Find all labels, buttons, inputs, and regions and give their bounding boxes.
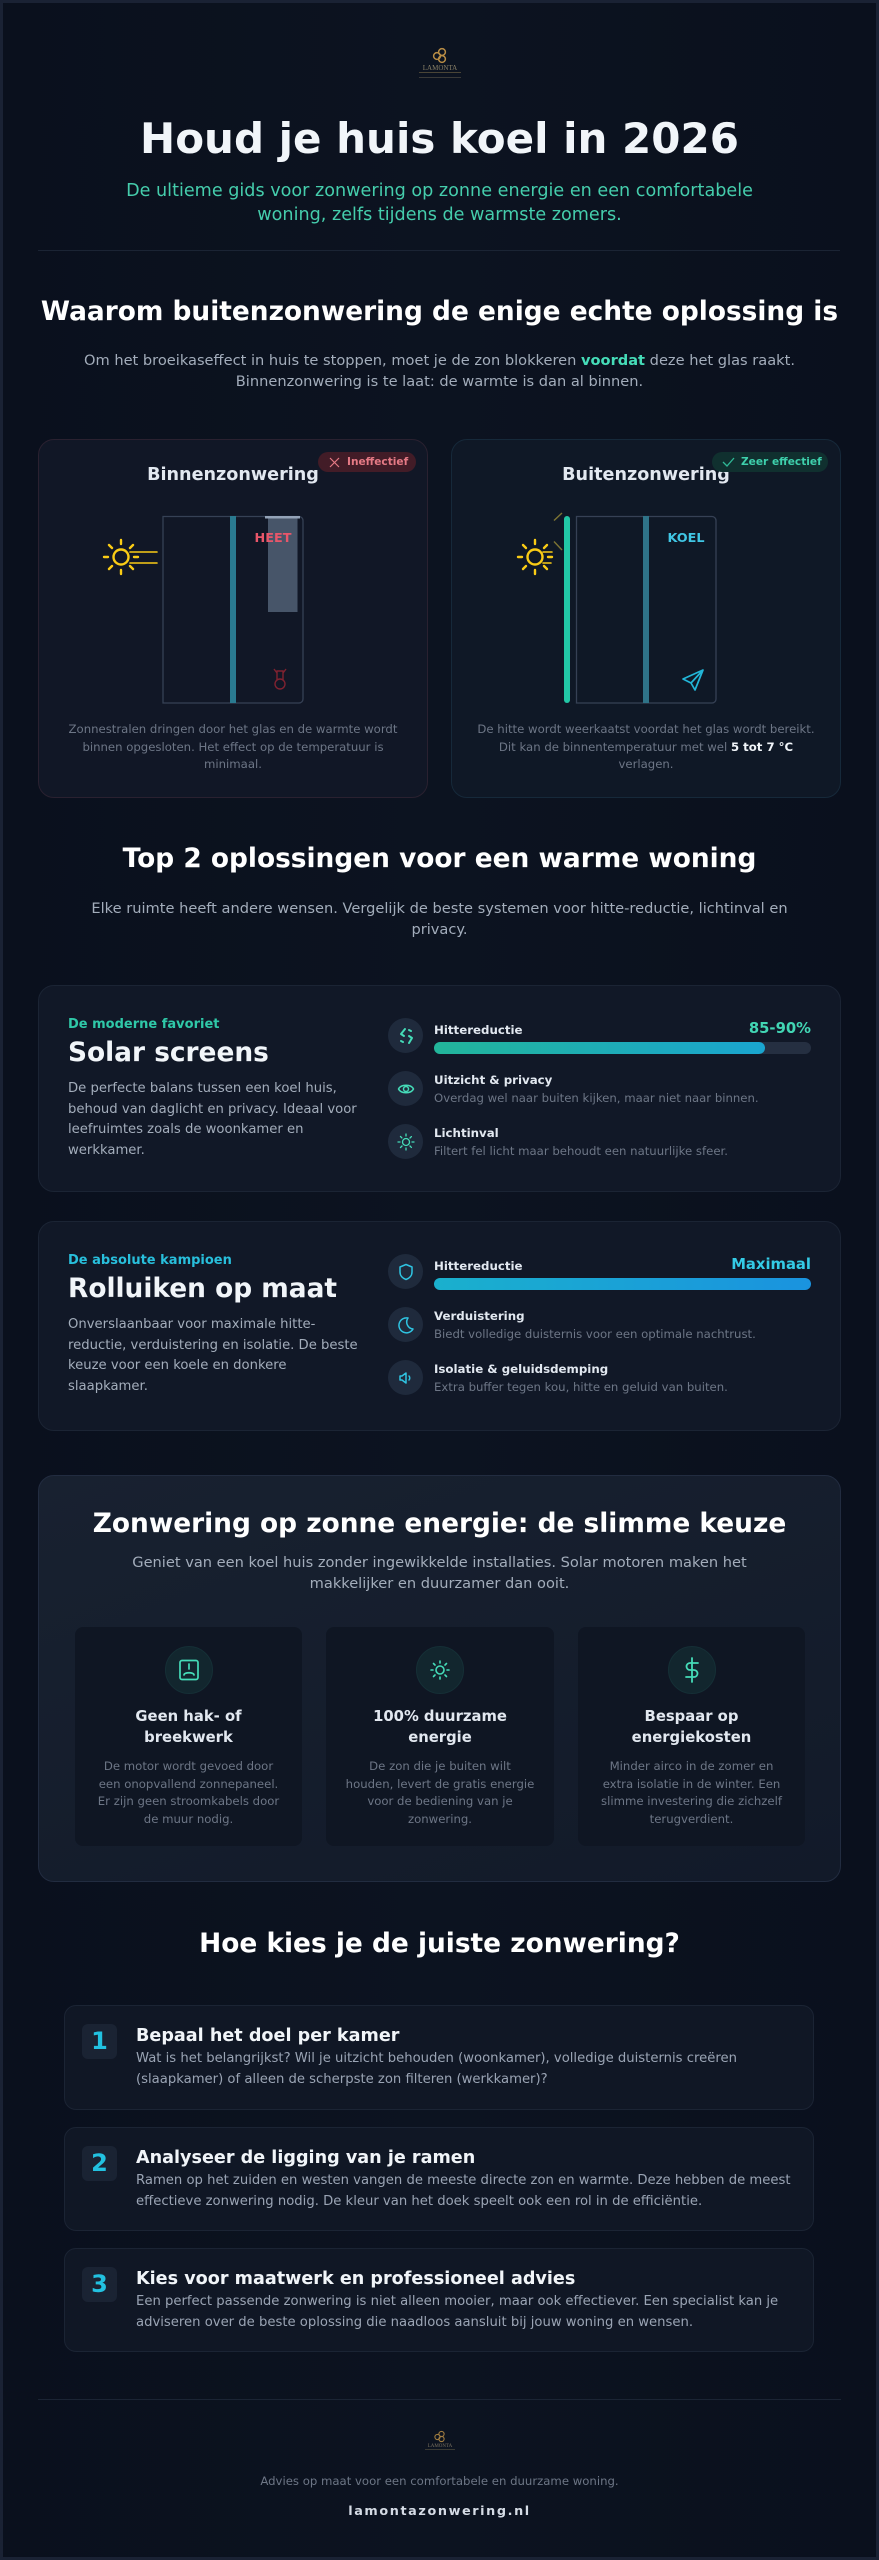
description — [68, 1317, 358, 1394]
step 3 — [64, 2248, 814, 2352]
card text: Minder airco in de zomer en — [610, 1759, 773, 1773]
heading: rolluiken: Rolluiken op maat — [68, 1273, 337, 1304]
badge: ineffectief — [318, 452, 416, 472]
card text: houden, levert de gratis energie — [346, 1777, 534, 1791]
intro paragraph: Binnenzonwering is te laat: de warmte is dan al binnen. — [236, 372, 643, 390]
heading: solar screens: Solar screens — [68, 1037, 269, 1068]
card title: energie — [408, 1729, 472, 1746]
panel text — [69, 722, 398, 771]
feature: verduistering: Verduistering — [434, 1309, 525, 1323]
card text: de muur nodig. — [144, 1812, 233, 1826]
number 1 — [82, 2024, 117, 2059]
panel text: minimaal. — [204, 757, 262, 771]
description: Onverslaanbaar voor maximale hitte- — [68, 1317, 315, 1332]
card text: De motor wordt gevoed door — [104, 1759, 273, 1773]
icon: maan — [388, 1307, 423, 1342]
icon: zon — [388, 1124, 423, 1159]
card text: een onopvallend zonnepaneel. — [99, 1777, 278, 1791]
heading: hoe kies je: Hoe kies je de juiste zonwering? — [199, 1928, 680, 1959]
description: werkkamer. — [68, 1142, 145, 1158]
intro: makkelijker en duurzamer dan ooit. — [310, 1575, 569, 1592]
number 3 — [82, 2267, 117, 2302]
intro paragraph: Om het broeikaseffect in huis te stoppen, moet je de zon blokkeren voordat deze het glas raakt. — [84, 352, 795, 369]
panel heading: binnenzonwering: Binnenzonwering — [147, 465, 319, 485]
intro: top 2 — [91, 900, 788, 938]
step text: Wat is het belangrijkst? Wil je uitzicht behouden (woonkamer), volledige duisternis creëren — [136, 2051, 737, 2066]
badge: ineffectief: Ineffectief — [347, 456, 408, 468]
description — [68, 1081, 357, 1158]
footer url: lamontazonwering.nl — [348, 2504, 531, 2519]
card title: breekwerk — [144, 1729, 233, 1746]
number 2 — [82, 2146, 117, 2181]
intro: top 2: privacy. — [411, 921, 468, 938]
step text — [136, 2173, 790, 2208]
description: slaapkamer. — [68, 1378, 148, 1394]
panel: zonne energie — [38, 1475, 841, 1882]
icon: hitte — [388, 1018, 423, 1053]
card title — [632, 1708, 751, 1746]
step text: Een perfect passende zonwering is niet alleen mooier, maar ook effectiever. Een specialist kan je — [136, 2294, 778, 2309]
icon: dollar — [668, 1646, 716, 1694]
description: behoud van daglicht en privacy. Ideaal voor — [68, 1102, 357, 1116]
number 2: 2 — [91, 2149, 108, 2177]
logo: La Monta top — [419, 48, 461, 78]
intro paragraph — [84, 352, 795, 390]
panel text: binnen opgesloten. Het effect op de temperatuur is — [82, 740, 384, 754]
step text: effectieve zonwering nodig. De kleur van het doek speelt ook een rol in de efficiëntie. — [136, 2194, 702, 2208]
card title: energiekosten — [632, 1729, 751, 1746]
panel: rolluiken — [38, 1221, 841, 1431]
subtitle — [126, 181, 753, 224]
label: moderne favoriet: De moderne favoriet — [68, 1017, 219, 1032]
card text: slimme investering die zichzelf — [601, 1794, 782, 1808]
feature: isolatie: Isolatie & geluidsdemping — [434, 1362, 608, 1376]
label: absolute kampioen: De absolute kampioen — [68, 1253, 232, 1268]
intro: top 2: Elke ruimte heeft andere wensen. Vergelijk de beste systemen voor hitte-reductie, lichtinval en — [91, 900, 788, 917]
icon: schild — [388, 1254, 423, 1289]
feature: hittereductie: Hittereductie — [434, 1023, 523, 1037]
card title: Bespaar op — [645, 1708, 738, 1725]
icon: zon — [416, 1646, 464, 1694]
card text: De zon die je buiten wilt — [369, 1759, 511, 1773]
description: reductie, verduistering en isolatie. De beste — [68, 1338, 358, 1352]
feature: lichtinval: Lichtinval — [434, 1126, 499, 1140]
panel text: verlagen. — [618, 757, 674, 771]
step title: Kies voor maatwerk en professioneel advies — [136, 2269, 575, 2289]
value: maximaal: Maximaal — [731, 1256, 811, 1273]
subtitle: woning, zelfs tijdens de warmste zomers. — [257, 204, 622, 224]
step text: Ramen op het zuiden en westen vangen de meeste directe zon en warmte. Deze hebben de meest — [136, 2173, 790, 2188]
intro — [132, 1554, 747, 1592]
step title: Bepaal het doel per kamer — [136, 2026, 399, 2046]
card text: Er zijn geen stroomkabels door — [98, 1794, 279, 1808]
footer text: Advies op maat voor een comfortabele en duurzame woning. — [260, 2474, 619, 2488]
logo: footer — [425, 2430, 455, 2450]
feature: hittereductie: Hittereductie — [434, 1259, 523, 1273]
step text: (slaapkamer) of alleen de scherpste zon filteren (werkkamer)? — [136, 2072, 548, 2086]
diagram: buitenzonwering raam — [516, 512, 717, 704]
step title: Analyseer de ligging van je ramen — [136, 2148, 475, 2168]
logo: La Monta top: LAMONTA — [423, 64, 457, 72]
badge: zeer effectief: Zeer effectief — [741, 456, 822, 468]
card text: zonwering. — [408, 1812, 472, 1826]
description: De perfecte balans tussen een koel huis, — [68, 1081, 337, 1096]
icon: oog — [388, 1071, 423, 1106]
card title — [373, 1708, 507, 1746]
subtitle: De ultieme gids voor zonwering op zonne energie en een comfortabele — [126, 181, 753, 201]
panel: rolluiken: Extra buffer tegen kou, hitte en geluid van buiten. — [434, 1380, 728, 1394]
panel: solar screens: Overdag wel naar buiten kijken, maar niet naar binnen. — [434, 1091, 759, 1105]
card title — [135, 1708, 242, 1746]
step 2 — [64, 2127, 814, 2231]
icon: zon — [518, 540, 552, 574]
panel: solar screens: Filtert fel licht maar behoudt een natuurlijke sfeer. — [434, 1144, 728, 1158]
progress bar — [434, 1278, 811, 1290]
card text: extra isolatie in de winter. Een — [603, 1777, 780, 1791]
title: Houd je huis koel in 2026 — [140, 114, 739, 163]
diagram: binnenzonwering raam — [102, 516, 304, 704]
step text — [136, 2294, 778, 2330]
description: leefruimtes zoals de woonkamer en — [68, 1122, 303, 1137]
reflected rays — [554, 513, 562, 550]
panel: rolluiken: Biedt volledige duisternis voor een optimale nachtrust. — [434, 1327, 756, 1341]
card text: voor de bediening van je — [367, 1794, 513, 1808]
badge: zeer effectief — [712, 452, 828, 472]
heading: waarom buitenzonwering: Waarom buitenzonwering de enige echte oplossing is — [41, 296, 838, 327]
heading: top 2 oplossingen: Top 2 oplossingen voor een warme woning — [123, 843, 756, 874]
icon: geluid — [388, 1360, 423, 1395]
card text — [98, 1759, 280, 1826]
card text: terugverdient. — [650, 1812, 733, 1826]
panel: binnenzonwering — [38, 439, 428, 798]
card: duurzame energie — [326, 1627, 554, 1846]
outer screen — [564, 516, 570, 703]
card text — [346, 1759, 534, 1826]
icon: thermometer — [274, 669, 286, 689]
panel text — [477, 722, 815, 771]
number 3: 3 — [91, 2270, 108, 2298]
description: keuze voor een koele en donkere — [68, 1358, 287, 1373]
step 1 — [64, 2005, 814, 2110]
window — [163, 516, 303, 703]
panel text: De hitte wordt weerkaatst voordat het glas wordt bereikt. — [477, 722, 815, 736]
intro: Geniet van een koel huis zonder ingewikkelde installaties. Solar motoren maken het — [132, 1554, 747, 1571]
card: geen hak- of breekwerk — [75, 1627, 302, 1846]
label: koel: KOEL — [667, 531, 705, 546]
step text: adviseren over de beste oplossing die naadloos aansluit bij jouw woning en wensen. — [136, 2314, 693, 2330]
panel heading: buitenzonwering: Buitenzonwering — [562, 465, 730, 485]
icon: paper plane — [683, 670, 703, 690]
value: 85-90%: 85-90% — [749, 1020, 811, 1037]
panel: buitenzonwering — [451, 439, 841, 798]
feature: uitzicht: Uitzicht & privacy — [434, 1073, 552, 1087]
panel: solar screens — [38, 985, 841, 1192]
icon: zon — [104, 540, 157, 574]
card text — [601, 1759, 782, 1826]
card title: Geen hak- of — [135, 1708, 242, 1725]
card: bespaar — [578, 1627, 805, 1846]
panel text: Dit kan de binnentemperatuur met wel 5 tot 7 °C — [499, 740, 793, 754]
number 1: 1 — [91, 2027, 108, 2055]
label: heet: HEET — [255, 531, 292, 546]
heading: slimme keuze: Zonwering op zonne energie: de slimme keuze — [93, 1508, 786, 1539]
progress bar — [434, 1042, 811, 1054]
icon: paneel — [165, 1646, 213, 1694]
step text — [136, 2051, 737, 2086]
window — [576, 516, 716, 703]
logo: footer: LAMONTA — [428, 2444, 453, 2449]
panel text: Zonnestralen dringen door het glas en de warmte wordt — [69, 722, 397, 736]
card title: 100% duurzame — [373, 1708, 507, 1725]
